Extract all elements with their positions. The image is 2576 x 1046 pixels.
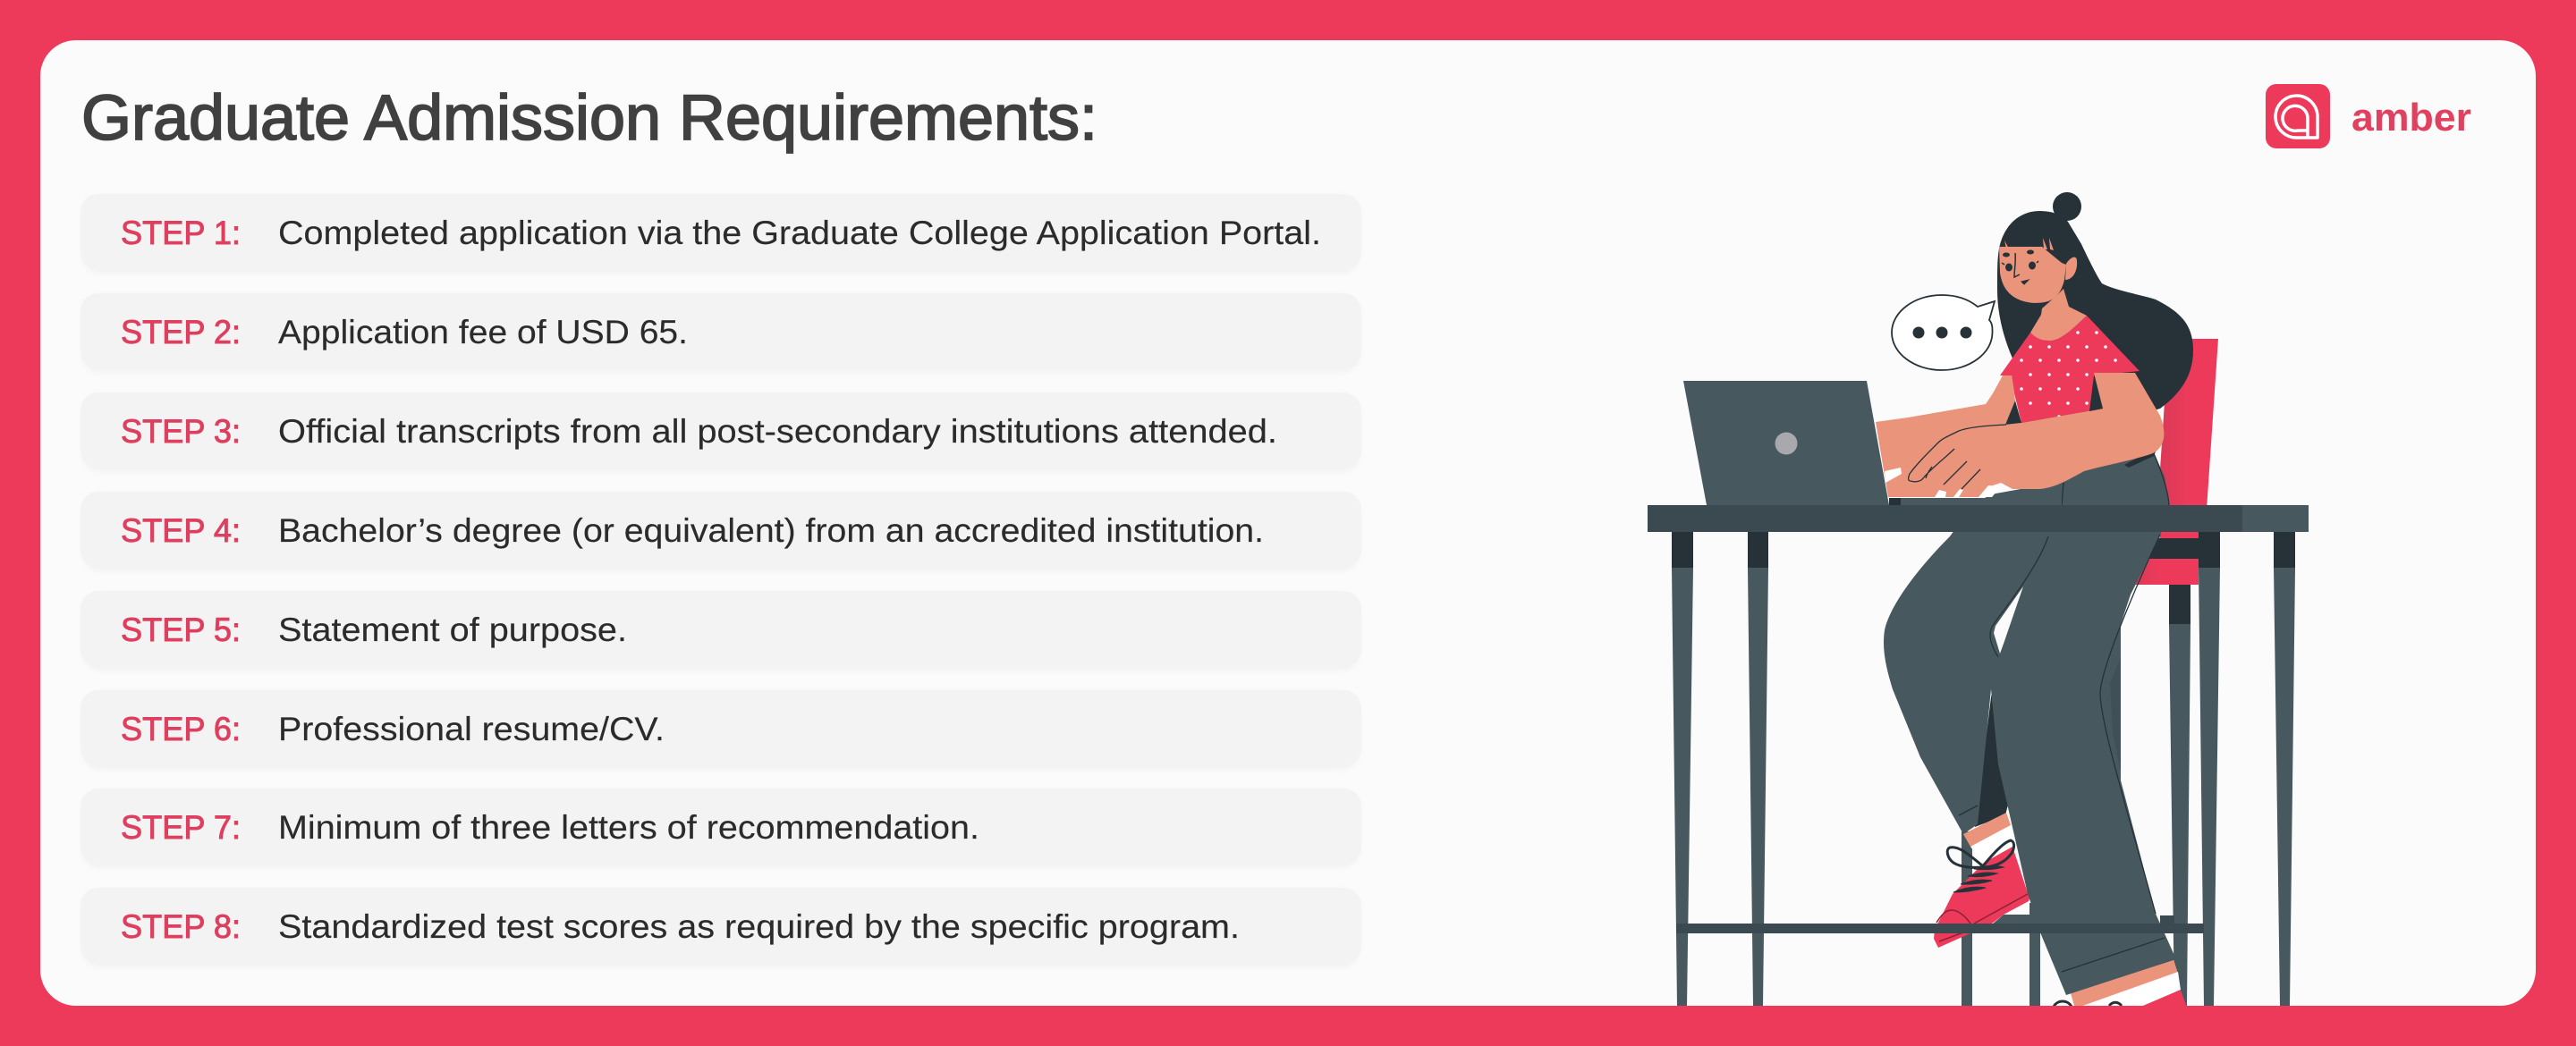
step 1 row: STEP 1: bbox=[121, 215, 241, 251]
logo wordmark: amber bbox=[2351, 96, 2471, 139]
step 3 row bbox=[80, 392, 1361, 472]
footrest bar bbox=[1676, 924, 2204, 933]
step 4 row: Bachelor’s degree (or equivalent) from an accredited institution. bbox=[278, 512, 1264, 549]
step 3 row: STEP 3: bbox=[121, 413, 241, 450]
dark shadow under sleeve bbox=[2005, 375, 2103, 425]
hand lines bbox=[1909, 425, 2006, 489]
illustration: woman at desk with laptop bbox=[1648, 192, 2309, 1010]
gap between legs bbox=[1994, 586, 2023, 654]
skin and sock front bbox=[2052, 960, 2186, 1006]
back hair bbox=[1997, 211, 2193, 429]
desk leg right back bbox=[2274, 532, 2295, 1006]
t-shirt bbox=[2000, 316, 2140, 423]
pants inner shade bbox=[2110, 657, 2121, 771]
step 7 row: STEP 7: bbox=[121, 809, 241, 846]
step 6 row: STEP 6: bbox=[121, 711, 241, 747]
pants seam lines bbox=[1959, 451, 2169, 972]
step 2 row: STEP 2: bbox=[121, 314, 241, 350]
fringe slits bbox=[2004, 238, 2054, 250]
step 8 row: STEP 8: bbox=[121, 908, 241, 945]
step 3 row: Official transcripts from all post-secondary institutions attended. bbox=[278, 413, 1277, 450]
step 7 row bbox=[80, 789, 1361, 868]
step 2 row: Application fee of USD 65. bbox=[278, 314, 688, 350]
title: Graduate Admission Requirements: bbox=[81, 83, 1097, 154]
finger gaps: white keyboard bbox=[1885, 468, 2001, 497]
step 4 row: STEP 4: bbox=[121, 512, 241, 549]
rear shoe bbox=[1934, 840, 2029, 948]
step 8 row bbox=[80, 888, 1361, 967]
list of steps bbox=[80, 194, 1361, 967]
pants bbox=[1884, 451, 2176, 995]
chair bbox=[1962, 339, 2218, 1006]
step 1 row bbox=[80, 194, 1361, 274]
icon: logo mark bbox=[2266, 84, 2330, 148]
desk leg left front bbox=[1672, 532, 1693, 1006]
desk leg right front bbox=[2199, 532, 2220, 1006]
neck bbox=[2030, 289, 2087, 341]
face bbox=[1999, 247, 2066, 303]
step 5 row: Statement of purpose. bbox=[278, 612, 627, 648]
desk bbox=[1648, 505, 2309, 1006]
block under shin above footrest bbox=[1993, 915, 2029, 924]
arms and hand bbox=[1876, 373, 2164, 497]
desk leg left back bbox=[1748, 532, 1768, 1006]
step 6 row bbox=[80, 690, 1361, 770]
speech bubble bbox=[1892, 295, 1995, 370]
laptop bbox=[1683, 381, 2062, 505]
step 2 row bbox=[80, 293, 1361, 373]
step 5 row bbox=[80, 591, 1361, 671]
ear bbox=[2065, 257, 2077, 280]
step 4 row bbox=[80, 492, 1361, 571]
woman bbox=[1876, 192, 2193, 1010]
step 7 row: Minimum of three letters of recommendation. bbox=[278, 809, 979, 846]
step 1 row: Completed application via the Graduate College Application Portal. bbox=[278, 215, 1321, 251]
step 6 row: Professional resume/CV. bbox=[278, 711, 665, 747]
face details bbox=[2002, 250, 2038, 284]
step 8 row: Standardized test scores as required by the specific program. bbox=[278, 908, 1240, 945]
hair bun bbox=[2053, 192, 2081, 221]
sock and skin rear bbox=[1963, 813, 2011, 849]
step 5 row: STEP 5: bbox=[121, 612, 241, 648]
logo: amber bbox=[2266, 84, 2471, 148]
waist shadow bbox=[2124, 451, 2156, 468]
far leg shadow bbox=[1975, 694, 2007, 827]
